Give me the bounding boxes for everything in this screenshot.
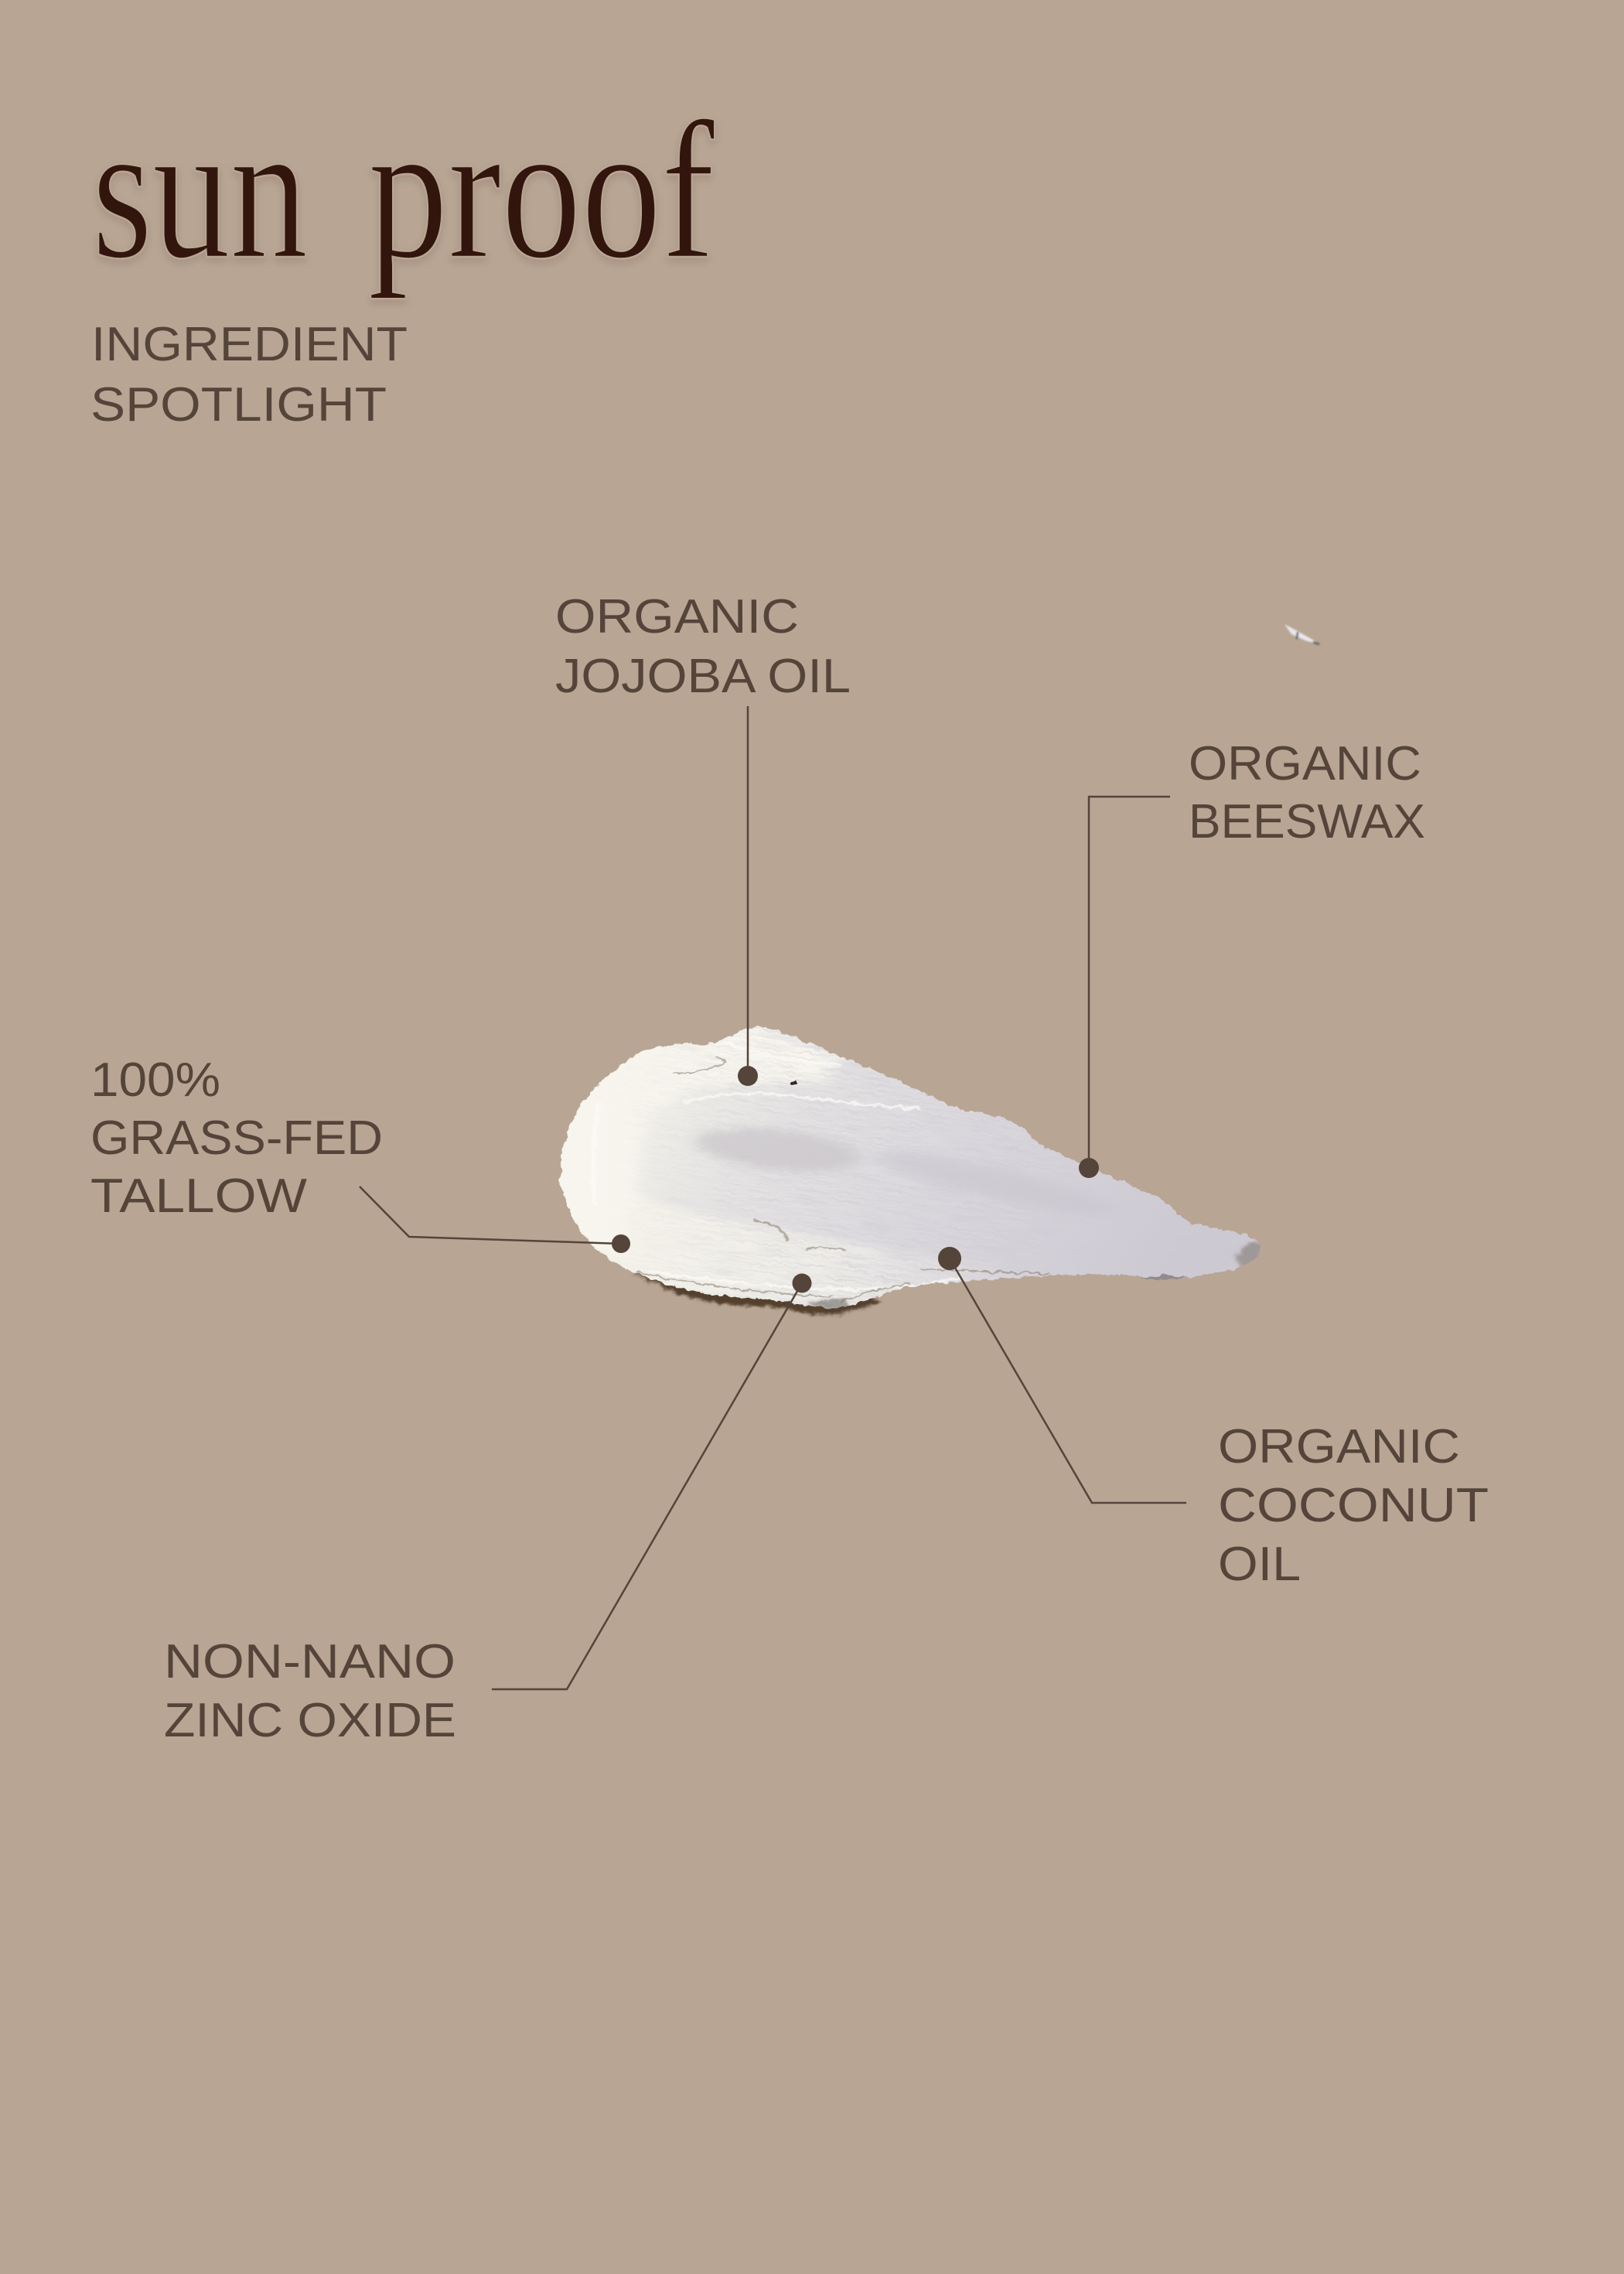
callout: organic jojoba oil: JOJOBA OIL bbox=[555, 650, 851, 703]
speck of cream bbox=[1285, 624, 1319, 644]
callout: organic beeswax: BEESWAX bbox=[1189, 795, 1425, 848]
callout: non-nano zinc oxide: ZINC OXIDE bbox=[164, 1694, 456, 1747]
title: proof bbox=[368, 82, 715, 300]
dark tip bbox=[1236, 1240, 1264, 1268]
lower warm area bbox=[558, 1182, 954, 1309]
callout: organic beeswax bbox=[1079, 737, 1425, 1178]
callout: organic coconut oil bbox=[938, 1247, 1489, 1591]
cream swatch bbox=[558, 1026, 1261, 1318]
title bbox=[92, 82, 715, 300]
subtitle: INGREDIENT bbox=[91, 318, 408, 371]
infographic canvas bbox=[91, 119, 1488, 1737]
upper warm rim bbox=[555, 1023, 847, 1255]
callout: organic beeswax: ORGANIC bbox=[1189, 737, 1421, 790]
callout: non-nano zinc oxide bbox=[164, 1273, 812, 1747]
callout: organic coconut oil: COCONUT bbox=[1218, 1479, 1489, 1532]
callout: grass-fed tallow: GRASS-FED bbox=[90, 1111, 383, 1165]
callout: grass-fed tallow: 100% bbox=[90, 1053, 220, 1107]
subtitle: SPOTLIGHT bbox=[90, 378, 387, 432]
callout: organic jojoba oil bbox=[555, 590, 851, 1086]
brush texture bbox=[674, 1027, 1238, 1308]
title: sun bbox=[92, 82, 308, 300]
highlights bbox=[650, 1041, 960, 1292]
grey patch bbox=[693, 1126, 858, 1173]
callout: grass-fed tallow: TALLOW bbox=[90, 1169, 308, 1223]
subtitle bbox=[90, 318, 408, 432]
callout: non-nano zinc oxide: NON-NANO bbox=[164, 1635, 455, 1688]
creases bbox=[637, 1056, 1049, 1302]
callout: organic coconut oil: ORGANIC bbox=[1218, 1420, 1460, 1473]
callout: organic jojoba oil: ORGANIC bbox=[555, 590, 799, 644]
callout: organic coconut oil: OIL bbox=[1218, 1538, 1301, 1591]
callout: grass-fed tallow bbox=[90, 1053, 630, 1253]
